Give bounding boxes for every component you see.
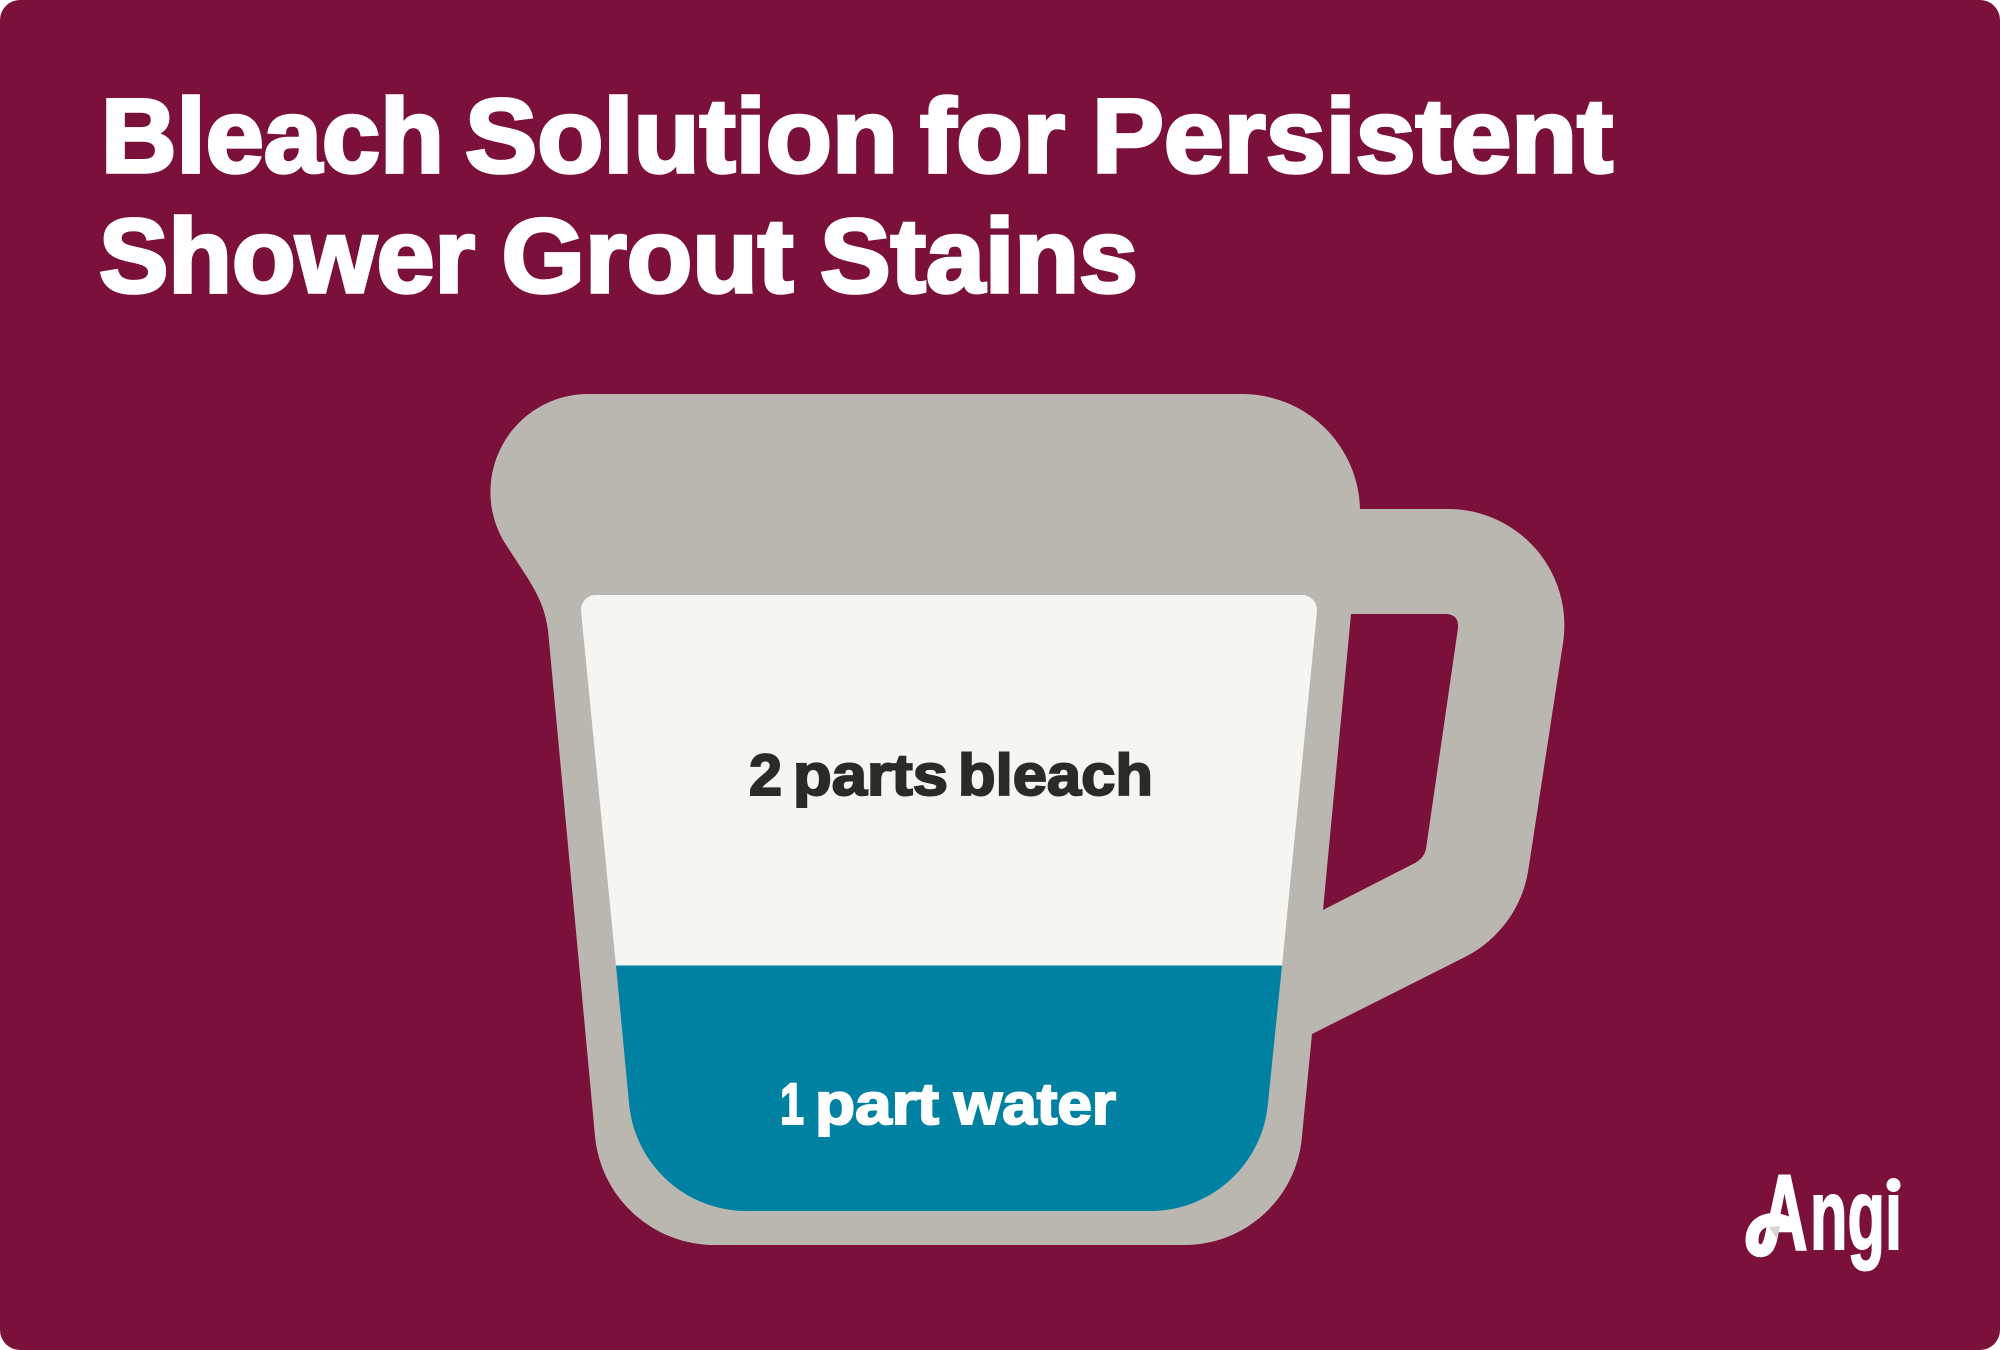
label: 1 part water: part [815,1072,939,1137]
label: 2 parts bleach [749,743,1153,808]
measuring jug illustration [490,394,1564,1245]
title: Solution [465,78,898,195]
title: for [920,78,1065,195]
jug body and handle [490,394,1564,1245]
title: Persistent [1092,78,1613,195]
label: 2 parts bleach: parts [793,743,948,808]
label: 2 parts bleach: bleach [958,743,1153,808]
title: Stains [820,198,1138,315]
label: 1 part water: 1 [780,1072,804,1137]
label: 2 parts bleach: 2 [749,743,782,808]
title: Shower [99,198,475,315]
label: 1 part water: water [953,1072,1116,1137]
water layer [616,966,1282,1211]
title: Bleach [101,78,444,195]
Angi logo: ngi [1810,1159,1902,1271]
title: Grout [502,198,794,315]
title [99,78,1613,315]
bleach layer [581,595,1317,966]
label: 1 part water [780,1072,1116,1137]
Angi logo: A [1762,1154,1807,1272]
Angi logo [1752,1154,1904,1272]
